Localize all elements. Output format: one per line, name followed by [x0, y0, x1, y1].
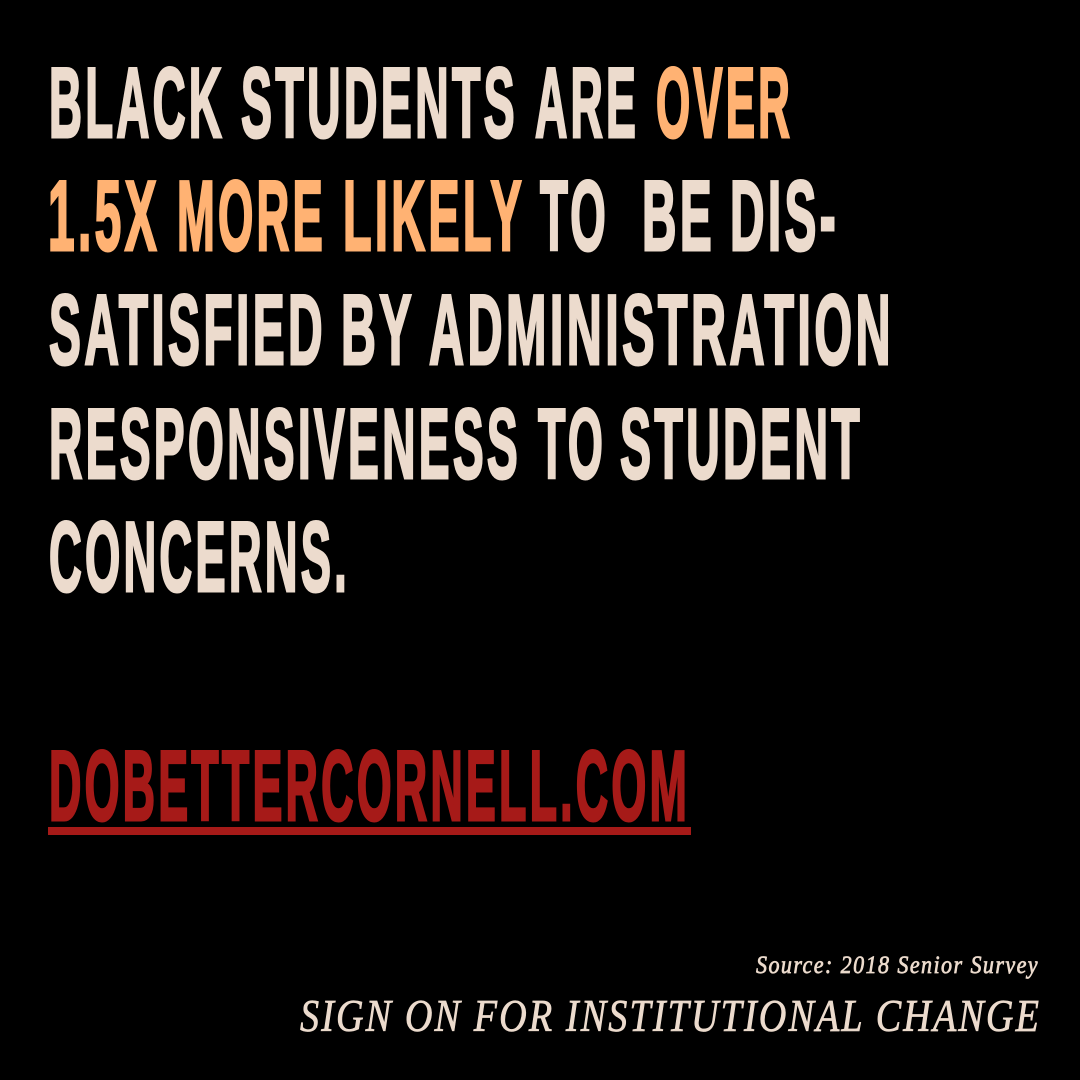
website link: [48, 730, 691, 841]
headline statement: TO: [540, 160, 609, 271]
source note: Source: 2018 Senior Survey: [756, 952, 1039, 979]
headline statement: 1.5X: [48, 160, 160, 271]
headline statement: TO: [538, 388, 606, 499]
headline statement: STUDENTS: [241, 47, 518, 158]
headline statement: [48, 47, 894, 612]
headline statement: BE: [642, 160, 715, 271]
headline statement: CONCERNS.: [49, 501, 350, 612]
headline statement: BLACK: [49, 47, 225, 158]
headline statement: RESPONSIVENESS: [49, 388, 521, 499]
headline statement: DIS-: [730, 160, 839, 271]
headline statement: OVER: [656, 47, 793, 158]
headline statement: SATISFIED: [49, 274, 326, 385]
headline statement: BY: [341, 274, 415, 385]
headline statement: MORE: [177, 160, 326, 271]
headline statement: LIKELY: [343, 160, 525, 271]
headline statement: ARE: [535, 47, 639, 158]
